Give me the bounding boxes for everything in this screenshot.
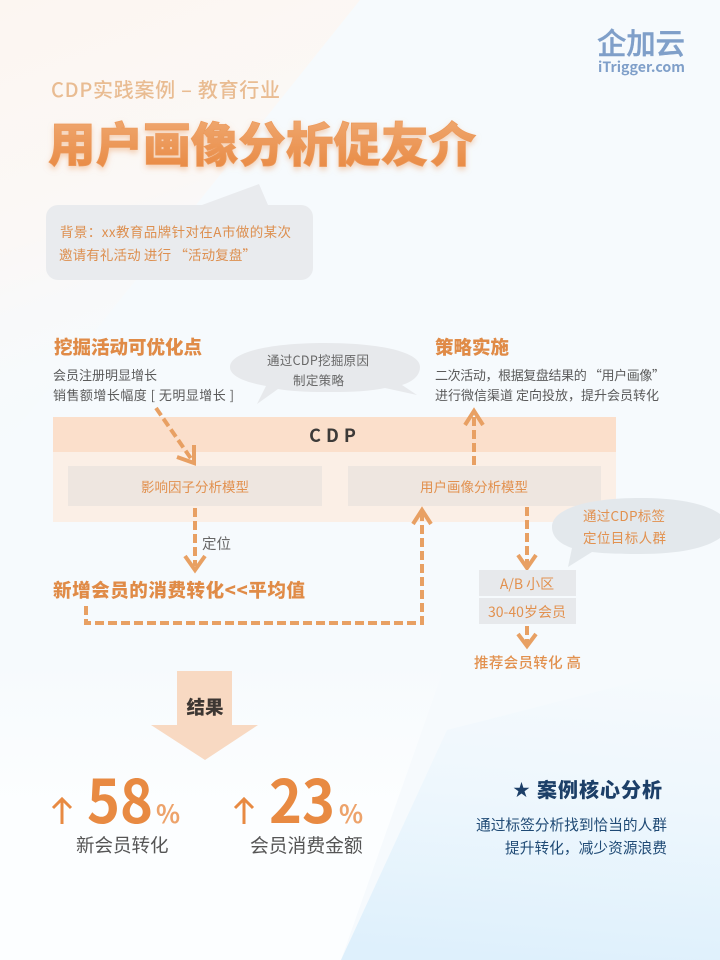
stat: member spend: % [339, 795, 363, 831]
callout: CDP finds causes [230, 343, 420, 404]
text block: optimisation points: 会员注册明显增长 [53, 365, 157, 384]
icon: up arrow [235, 799, 253, 824]
callout: background: 邀请有礼活动 进行 “活动复盘” [59, 244, 256, 264]
tag: A/B community: A/B 小区 [500, 574, 554, 594]
tag: A/B community [479, 570, 576, 596]
panel: core analysis: ★ [513, 776, 530, 801]
arrow: audience to conversion [518, 626, 536, 646]
stat: new member conversion: % [156, 795, 180, 831]
text: recommend conversion high: 推荐会员转化 高 [474, 652, 581, 673]
callout: CDP finds causes: 制定策略 [293, 370, 344, 389]
heading: optimisation points: 挖掘活动可优化点 [54, 334, 202, 360]
callout: background [46, 184, 313, 280]
panel: influence factor model: 影响因子分析模型 [141, 476, 249, 496]
stat: member spend: 会员消费金额 [250, 831, 363, 858]
panel: core analysis [476, 774, 667, 858]
stat: member spend: 23 [269, 754, 335, 841]
logo: 企加云 [597, 21, 685, 63]
arrow: locate down [185, 508, 205, 570]
text block: strategy [435, 365, 665, 404]
panel: user persona model [348, 466, 601, 506]
tag: age group: 30-40岁会员 [488, 602, 566, 622]
callout: locate audience: 定位目标人群 [583, 527, 666, 547]
text block: strategy: 二次活动，根据复盘结果的 “用户画像” [435, 365, 665, 384]
text: new member conversion: 新增会员的消费转化<<平均值 [53, 577, 305, 603]
arrow: result [151, 671, 258, 760]
arrow: strategy up [465, 411, 483, 465]
text block: optimisation points [53, 365, 234, 404]
stat: new member conversion [53, 754, 180, 858]
tag: age group [479, 598, 576, 624]
callout: locate audience: 通过CDP标签 [583, 505, 666, 525]
title: 用户画像分析促友介 [48, 107, 476, 176]
arrow: points to influence model [156, 408, 194, 463]
panel: core analysis: 提升转化，减少资源浪费 [505, 837, 667, 858]
panel: core analysis: 通过标签分析找到恰当的人群 [476, 814, 667, 835]
arrow: loop to persona model [86, 510, 431, 623]
stat: new member conversion: 新会员转化 [76, 832, 169, 858]
arrow: result: 结果 [186, 694, 224, 720]
stat: new member conversion: 58 [87, 754, 153, 841]
CDP label: CDP [309, 422, 361, 448]
label: locate: 定位 [202, 533, 231, 554]
panel: CDP [53, 417, 616, 522]
logo: iTrigger.com [598, 57, 685, 77]
arrow: persona to audience [518, 507, 536, 568]
panel: core analysis: 案例核心分析 [537, 774, 662, 803]
panel: user persona model: 用户画像分析模型 [420, 476, 528, 496]
heading: strategy: 策略实施 [435, 334, 509, 360]
stat: member spend [235, 754, 363, 858]
callout: locate audience [552, 498, 720, 567]
icon: up arrow [53, 799, 71, 824]
panel: influence factor model [68, 466, 322, 506]
text block: optimisation points: 销售额增长幅度 [ 无明显增长 ] [53, 385, 234, 404]
subtitle: CDP实践案例 – 教育行业 [51, 74, 280, 103]
callout: background: 背景：xx教育品牌针对在A市做的某次 [60, 221, 291, 241]
callout: CDP finds causes: 通过CDP挖掘原因 [267, 350, 369, 369]
text block: strategy: 进行微信渠道 定向投放，提升会员转化 [435, 385, 659, 404]
